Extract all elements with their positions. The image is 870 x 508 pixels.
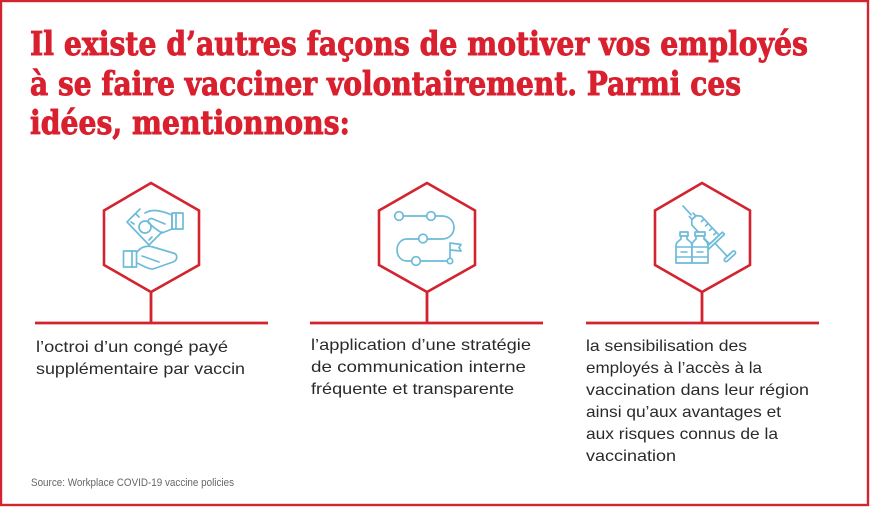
hexagon connector and rule (586, 292, 819, 323)
hexagon connector and rule (310, 292, 543, 323)
text: awareness: la sensibilisation des (586, 338, 747, 355)
vials (676, 232, 708, 263)
panel: awareness (586, 183, 819, 465)
panel: paid leave (35, 183, 268, 378)
text: awareness: employés à l’accès à la (586, 360, 762, 377)
text: paid leave (36, 339, 245, 378)
text: communication strategy: de communication interne (311, 359, 526, 376)
text: communication strategy: l’application d’une stratégie (311, 337, 531, 354)
syringe (675, 198, 739, 265)
text: awareness: ainsi qu’aux avantages et (586, 404, 782, 421)
icon: hands exchanging money (124, 209, 183, 269)
icon: vaccine vials and syringe (675, 198, 739, 265)
text: communication strategy (311, 337, 531, 398)
title (30, 24, 808, 142)
hexagon (104, 183, 199, 292)
text: awareness: aux risques connus de la (586, 426, 778, 443)
text: paid leave: l’octroi d’un congé payé (36, 339, 228, 356)
hexagon (655, 183, 750, 292)
text: paid leave: supplémentaire par vaccin (36, 361, 245, 378)
title: à se faire vacciner volontairement. Parmi ces (30, 64, 741, 103)
text: communication strategy: fréquente et transparente (311, 381, 514, 398)
text: awareness (586, 338, 809, 465)
title: idées, mentionnons: (30, 103, 350, 142)
source note: Source: Workplace COVID-19 vaccine policies (31, 477, 235, 489)
icon: route with flag (395, 212, 461, 265)
hexagon (379, 183, 475, 292)
text: awareness: vaccination (586, 448, 676, 465)
text: awareness: vaccination dans leur région (586, 382, 809, 399)
hexagon connector and rule (35, 292, 268, 323)
panel: communication strategy (310, 183, 543, 398)
